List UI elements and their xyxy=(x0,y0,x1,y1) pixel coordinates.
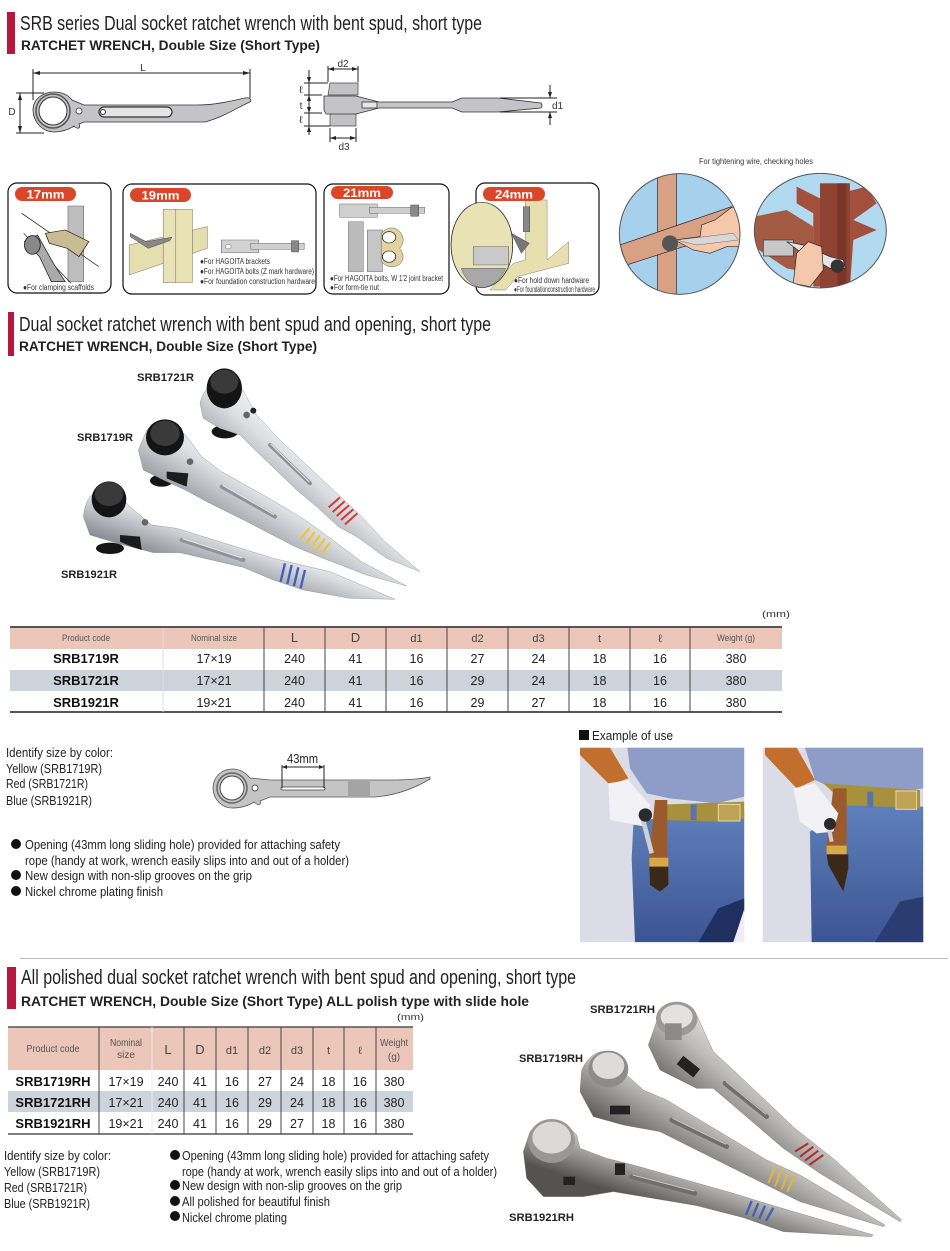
row: SRB1719R: 27 xyxy=(471,652,484,666)
table header: L xyxy=(291,630,298,645)
text: identify size by color: Identify size by color: xyxy=(4,1149,111,1163)
table header: L xyxy=(164,1042,172,1057)
text: identify size by color: Red (SRB1721R) xyxy=(6,777,88,791)
row: SRB1719RH: 16 xyxy=(225,1075,239,1089)
row: SRB1721RH: SRB1721RH xyxy=(15,1095,91,1110)
table header: Product code xyxy=(62,633,110,643)
badge: 24mm: 24mm xyxy=(495,188,533,202)
row: SRB1719R: SRB1719R xyxy=(53,651,119,666)
caption: tightening wire: For tightening wire, checking holes xyxy=(699,157,813,166)
text: identify size by color: Yellow (SRB1719R) xyxy=(4,1165,100,1179)
usage list: 21mm: ●For form-tie nut xyxy=(330,283,380,292)
row: SRB1921RH: 240 xyxy=(158,1117,178,1131)
table: R series specifications xyxy=(10,627,782,712)
section header: SRB series xyxy=(7,12,482,54)
usage list: 19mm xyxy=(200,257,315,286)
section header: opening: RATCHET WRENCH, Double Size (Short Type) xyxy=(19,339,317,354)
text: identify size by color: Red (SRB1721R) xyxy=(4,1181,87,1195)
panel: 17mm: ●For clamping scaffolds xyxy=(23,283,94,292)
usage list: 24mm: ●For hold down hardware xyxy=(514,276,589,285)
illustration: tightening bolt on steel frame xyxy=(754,173,886,290)
table header xyxy=(62,630,755,645)
row: SRB1921RH: 41 xyxy=(193,1117,207,1131)
feature list: R series: New design with non-slip grooves on the grip xyxy=(25,869,252,883)
section header: all polished xyxy=(7,967,576,1009)
usage list: 19mm: ●For foundation construction hardware xyxy=(200,277,315,286)
panel: 17mm xyxy=(8,183,111,293)
row: SRB1721R: 29 xyxy=(471,674,484,688)
dimension diagram: top view: t xyxy=(300,101,303,112)
row: SRB1921R: SRB1921R xyxy=(53,695,119,710)
table header: d3 xyxy=(532,633,545,645)
row: SRB1721R: 17×21 xyxy=(196,674,232,688)
badge: 17mm: 17mm xyxy=(26,188,64,202)
label: SRB1721R: SRB1721R xyxy=(137,372,194,384)
row: SRB1719R xyxy=(53,651,746,666)
dimension diagram: top view: ℓ xyxy=(299,115,303,126)
wrench: SRB1921R blue xyxy=(83,481,395,599)
row: SRB1921R: 19×21 xyxy=(196,696,232,710)
row: SRB1921R: 380 xyxy=(726,696,746,710)
row: SRB1921R: 41 xyxy=(349,696,362,710)
unit label: mm: (mm) xyxy=(762,609,790,619)
row: SRB1721R: 16 xyxy=(653,674,667,688)
row: SRB1719RH xyxy=(15,1074,404,1089)
table header: Nominal size xyxy=(191,633,237,643)
illustration: bolt and joint bracket xyxy=(340,204,425,272)
panel: 24mm xyxy=(451,183,599,295)
heading: example of use: Example of use xyxy=(592,729,673,743)
row: SRB1721RH: 18 xyxy=(322,1096,335,1110)
row: SRB1721RH: 41 xyxy=(193,1096,207,1110)
row: SRB1721R xyxy=(53,673,746,688)
table header: D xyxy=(195,1042,205,1057)
table header: size xyxy=(117,1050,135,1061)
table header: d3 xyxy=(291,1045,303,1057)
usage list: 21mm xyxy=(330,274,444,292)
table header: d1 xyxy=(410,633,423,645)
row: SRB1721RH: 24 xyxy=(290,1096,304,1110)
row: SRB1921R: 29 xyxy=(471,696,484,710)
section header: all polished: RATCHET WRENCH, Double Size (Short Type) ALL polish type with slide hole xyxy=(21,994,530,1009)
row: SRB1921RH: 380 xyxy=(384,1117,404,1131)
table header: d1 xyxy=(226,1045,238,1057)
dimension diagram: top view: d1 xyxy=(552,101,564,112)
usage list: 19mm: ●For HAGOITA brackets xyxy=(200,257,270,266)
wrench: SRB1719R yellow xyxy=(138,419,407,586)
row: SRB1719R: 18 xyxy=(593,652,606,666)
product photo: three wrenches xyxy=(61,368,420,599)
dimension diagram: side view xyxy=(8,63,251,133)
table: RH series specifications xyxy=(8,1027,413,1134)
table header: D xyxy=(351,630,360,645)
feature list: RH series xyxy=(170,1149,497,1225)
row: SRB1719RH: 17×19 xyxy=(108,1075,144,1089)
dimension diagram: top view xyxy=(299,59,564,153)
feature list: R series: Opening (43mm long sliding hole) provided for attaching safety xyxy=(25,838,341,852)
row: SRB1721R: 18 xyxy=(593,674,606,688)
illustration: tightening wire on log xyxy=(619,173,742,297)
dimension diagram: top view: d2 xyxy=(337,59,349,70)
row: SRB1721RH: 380 xyxy=(384,1096,404,1110)
row: SRB1921RH: 29 xyxy=(258,1117,272,1131)
illustration: timber joint and bracket xyxy=(129,209,304,283)
dimension diagram: top view: ℓ xyxy=(299,85,303,96)
row: SRB1921RH: 18 xyxy=(322,1117,335,1131)
illustration: wrench on scaffold clamp xyxy=(22,206,99,283)
row: SRB1719R: 17×19 xyxy=(196,652,232,666)
feature list: R series xyxy=(11,838,349,899)
row: SRB1921RH: 27 xyxy=(290,1117,304,1131)
row: SRB1719RH: 24 xyxy=(290,1075,304,1089)
label: SRB1719RH: SRB1719RH xyxy=(519,1053,583,1065)
row: SRB1721R: 240 xyxy=(284,674,305,688)
row: SRB1719RH: 27 xyxy=(258,1075,272,1089)
feature list: R series: rope (handy at work, wrench easily slips into and out of a holder) xyxy=(25,854,349,868)
label: SRB1921R: SRB1921R xyxy=(61,569,117,581)
row: SRB1719R: 16 xyxy=(410,652,423,666)
row: SRB1721R: SRB1721R xyxy=(53,673,119,688)
feature list: RH series: Nickel chrome plating xyxy=(182,1211,287,1225)
row: SRB1921RH: 16 xyxy=(353,1117,367,1131)
row: SRB1721R: 380 xyxy=(726,674,746,688)
usage list: 19mm: ●For HAGOITA bolts (Z mark hardware) xyxy=(200,267,314,276)
product photo: three polished wrenches xyxy=(509,1002,902,1237)
feature list: RH series: Opening (43mm long sliding hole) provided for attaching safety xyxy=(182,1149,490,1163)
section header: opening: Dual socket ratchet wrench with bent spud and opening, short type xyxy=(19,314,491,336)
diagram: 43mm sliding hole: 43mm xyxy=(287,752,318,766)
row: SRB1721RH: 16 xyxy=(225,1096,239,1110)
wrench: SRB1721RH red xyxy=(648,1002,902,1222)
divider xyxy=(20,958,948,960)
photo: wrench in holster, left xyxy=(580,748,744,942)
table header: t xyxy=(598,633,601,645)
row: SRB1721RH xyxy=(15,1095,404,1110)
badge: 19mm: 19mm xyxy=(142,188,180,202)
table header: ℓ xyxy=(358,1045,362,1057)
text: identify size by color xyxy=(4,1149,111,1211)
table header: (g) xyxy=(388,1052,400,1063)
row: SRB1719R: 41 xyxy=(349,652,362,666)
row: SRB1921RH: 19×21 xyxy=(108,1117,144,1131)
section header: all polished: All polished dual socket ratchet wrench with bent spud and opening, short type xyxy=(21,967,576,989)
row: SRB1719RH: SRB1719RH xyxy=(15,1074,91,1089)
dimension diagram: side view: D xyxy=(8,107,16,118)
text: identify size by color: Blue (SRB1921R) xyxy=(6,794,92,808)
row: SRB1921R xyxy=(53,695,746,710)
row: SRB1721RH: 17×21 xyxy=(108,1096,144,1110)
diagram: 43mm sliding hole xyxy=(213,752,430,808)
usage list: 24mm xyxy=(514,276,595,294)
label: SRB1721RH: SRB1721RH xyxy=(590,1004,655,1016)
row: SRB1719RH: 380 xyxy=(384,1075,404,1089)
row: SRB1721R: 16 xyxy=(410,674,423,688)
table header: ℓ xyxy=(658,633,662,645)
dimension diagram: top view: d3 xyxy=(338,142,350,153)
badge: 21mm: 21mm xyxy=(343,186,381,200)
table header: Product code xyxy=(26,1044,80,1055)
section header: SRB series: RATCHET WRENCH, Double Size (Short Type) xyxy=(21,38,320,53)
wrench: SRB1721R red xyxy=(200,368,420,572)
row: SRB1719RH: 41 xyxy=(193,1075,207,1089)
table header: Weight xyxy=(380,1038,408,1049)
section header: SRB series: SRB series Dual socket ratchet wrench with bent spud, short type xyxy=(20,13,482,35)
row: SRB1921RH: SRB1921RH xyxy=(15,1116,91,1131)
table header: t xyxy=(327,1045,330,1057)
feature list: RH series: All polished for beautiful finish xyxy=(182,1195,330,1209)
label: SRB1921RH: SRB1921RH xyxy=(509,1212,574,1224)
text: identify size by color: Identify size by color: xyxy=(6,746,113,760)
row: SRB1921R: 16 xyxy=(653,696,667,710)
panel: 19mm xyxy=(123,184,316,294)
feature list: RH series: rope (handy at work, wrench easily slips into and out of a holder) xyxy=(182,1165,497,1179)
row: SRB1921R: 18 xyxy=(593,696,606,710)
row: SRB1719R: 24 xyxy=(532,652,545,666)
table header: d2 xyxy=(259,1045,271,1057)
usage list: 24mm: ●For foundationconstruction hardware xyxy=(514,285,595,294)
row: SRB1921R: 16 xyxy=(410,696,423,710)
label: SRB1719R: SRB1719R xyxy=(77,432,133,444)
photo: wrench in holster, right xyxy=(763,748,923,942)
row: SRB1721R: 41 xyxy=(349,674,362,688)
row: SRB1719RH: 18 xyxy=(322,1075,335,1089)
row: SRB1721R: 24 xyxy=(532,674,545,688)
wrench: SRB1719RH yellow xyxy=(580,1051,885,1227)
row: SRB1921R: 240 xyxy=(284,696,305,710)
row: SRB1719RH: 240 xyxy=(158,1075,178,1089)
row: SRB1921RH xyxy=(15,1116,404,1131)
table header: Nominal xyxy=(110,1038,142,1049)
wrench: SRB1921RH blue xyxy=(523,1119,873,1237)
feature list: RH series: New design with non-slip grooves on the grip xyxy=(182,1179,402,1193)
row: SRB1921R: 27 xyxy=(532,696,545,710)
text: identify size by color: Blue (SRB1921R) xyxy=(4,1197,90,1211)
row: SRB1921RH: 16 xyxy=(225,1117,239,1131)
section header: opening xyxy=(8,312,491,356)
row: SRB1721RH: 16 xyxy=(353,1096,367,1110)
row: SRB1721RH: 29 xyxy=(258,1096,272,1110)
illustration: hold down hardware xyxy=(451,200,569,290)
row: SRB1719R: 16 xyxy=(653,652,667,666)
badge: 19mm xyxy=(130,188,191,202)
row: SRB1719RH: 16 xyxy=(353,1075,367,1089)
table header xyxy=(26,1038,408,1063)
feature list: R series: Nickel chrome plating finish xyxy=(25,885,163,899)
usage list: 21mm: ●For HAGOITA bolts, W 1'2 joint bracket xyxy=(330,274,444,283)
text: identify size by color xyxy=(6,746,113,808)
panel: 21mm xyxy=(324,184,449,294)
row: SRB1721RH: 240 xyxy=(158,1096,178,1110)
table header: d2 xyxy=(471,633,484,645)
row: SRB1719R: 240 xyxy=(284,652,305,666)
text: identify size by color: Yellow (SRB1719R) xyxy=(6,762,102,776)
unit label: mm: (mm) xyxy=(397,1012,424,1022)
badge: 24mm xyxy=(483,187,545,202)
table header: Weight (g) xyxy=(717,633,755,643)
row: SRB1719R: 380 xyxy=(726,652,746,666)
dimension diagram: side view: L xyxy=(140,63,146,74)
